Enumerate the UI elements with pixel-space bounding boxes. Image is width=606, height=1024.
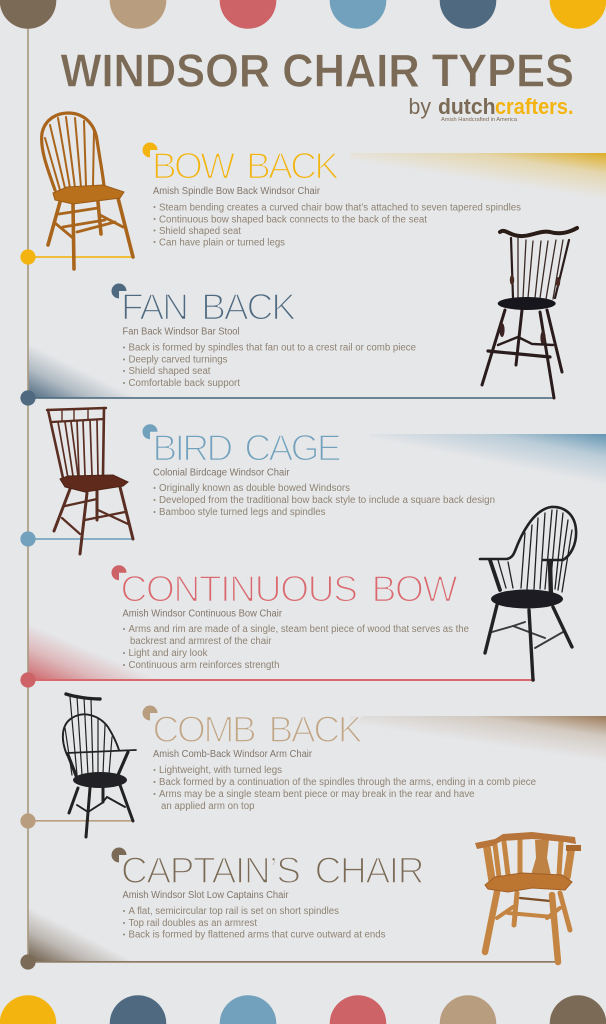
heading: CONTINUOUS BOW xyxy=(120,568,458,610)
chair: bird cage xyxy=(47,408,133,554)
chair: continuous bow xyxy=(480,507,576,680)
bottom colour dots xyxy=(0,995,606,1024)
bullet list xyxy=(123,906,386,940)
bullet list xyxy=(154,765,536,812)
section: comb back xyxy=(20,694,536,837)
chair: fan back stool xyxy=(482,228,577,398)
connector line and node xyxy=(20,249,131,265)
icon: heading dot xyxy=(143,706,158,720)
heading: CAPTAIN’S CHAIR xyxy=(121,850,424,891)
icon: heading dot xyxy=(112,565,126,580)
top colour dots xyxy=(0,0,606,29)
connector line and node xyxy=(20,672,535,688)
section: bird cage xyxy=(20,408,495,554)
bullet list xyxy=(123,624,469,671)
subtitle: Amish Spindle Bow Back Windsor Chair xyxy=(153,186,321,197)
chair: captain's chair xyxy=(475,832,581,962)
bullet list: Deeply carved turnings xyxy=(128,355,228,366)
bullet list: Continuous arm reinforces strength xyxy=(128,660,280,671)
bullet list xyxy=(123,343,416,389)
bullet list xyxy=(154,483,495,518)
chair: bow back xyxy=(42,113,133,269)
bullet list: Shield shaped seat xyxy=(128,366,211,377)
title: WINDSOR CHAIR TYPES xyxy=(60,44,574,96)
heading: FAN BACK xyxy=(121,286,296,328)
timeline vertical line xyxy=(27,28,29,962)
connector line and node xyxy=(20,390,555,406)
bullet list: Back formed by a continuation of the spindles through the arms, ending in a comb piece xyxy=(159,777,536,788)
byline logo: crafters. xyxy=(495,94,574,119)
bullet list: Light and airy look xyxy=(128,648,208,659)
bullet list: Comfortable back support xyxy=(128,378,240,389)
connector line and node xyxy=(20,954,560,970)
bullet list: Bamboo style turned legs and spindles xyxy=(159,507,326,518)
subtitle: Colonial Birdcage Windsor Chair xyxy=(153,467,290,478)
bullet list: A flat, semicircular top rail is set on short spindles xyxy=(128,906,339,917)
bullet list: Can have plain or turned legs xyxy=(159,237,285,248)
heading: COMB BACK xyxy=(152,709,363,750)
bullet list: Back is formed by spindles that fan out to a crest rail or comb piece xyxy=(128,343,416,354)
byline logo: dutch xyxy=(438,94,496,119)
bullet list: Continuous bow shaped back connects to the back of the seat xyxy=(159,214,427,225)
section: bow back xyxy=(20,113,521,269)
icon: heading dot xyxy=(112,848,126,862)
byline logo: by xyxy=(408,94,431,119)
bullet list: Originally known as double bowed Windsors xyxy=(159,483,350,494)
subtitle: Amish Comb-Back Windsor Arm Chair xyxy=(153,749,313,760)
bullet list: backrest and armrest of the chair xyxy=(130,636,272,647)
bullet list xyxy=(154,202,521,248)
subtitle: Fan Back Windsor Bar Stool xyxy=(122,326,240,337)
section: fan back xyxy=(20,228,577,406)
section: continuous bow xyxy=(20,507,576,688)
bullet list: Arms may be a single steam bent piece or may break in the rear and have xyxy=(159,789,475,800)
heading: BIRD CAGE xyxy=(152,428,342,468)
icon: heading dot xyxy=(112,284,126,298)
byline logo xyxy=(408,94,574,123)
bullet list: Shield shaped seat xyxy=(159,226,241,237)
connector line and node xyxy=(20,531,133,547)
bullet list: Lightweight, with turned legs xyxy=(159,765,282,776)
heading: BOW BACK xyxy=(152,146,339,186)
section: captain's chair xyxy=(20,832,581,970)
subtitle: Amish Windsor Slot Low Captains Chair xyxy=(122,890,289,901)
bullet list: Developed from the traditional bow back style to include a square back design xyxy=(159,495,495,506)
bullet list: Steam bending creates a curved chair bow that’s attached to seven tapered spindles xyxy=(159,202,521,213)
bullet list: Back is formed by flattened arms that curve outward at ends xyxy=(128,930,386,940)
subtitle: Amish Windsor Continuous Bow Chair xyxy=(122,608,283,619)
icon: heading dot xyxy=(143,143,158,158)
chair: comb back xyxy=(63,694,136,837)
byline logo: Amish Handcrafted in America xyxy=(441,117,517,123)
bullet list: an applied arm on top xyxy=(161,801,255,812)
bullet list: Top rail doubles as an armrest xyxy=(128,918,257,929)
icon: heading dot xyxy=(143,424,158,439)
bullet list: Arms and rim are made of a single, steam bent piece of wood that serves as the xyxy=(128,624,469,635)
connector line and node xyxy=(20,813,133,829)
